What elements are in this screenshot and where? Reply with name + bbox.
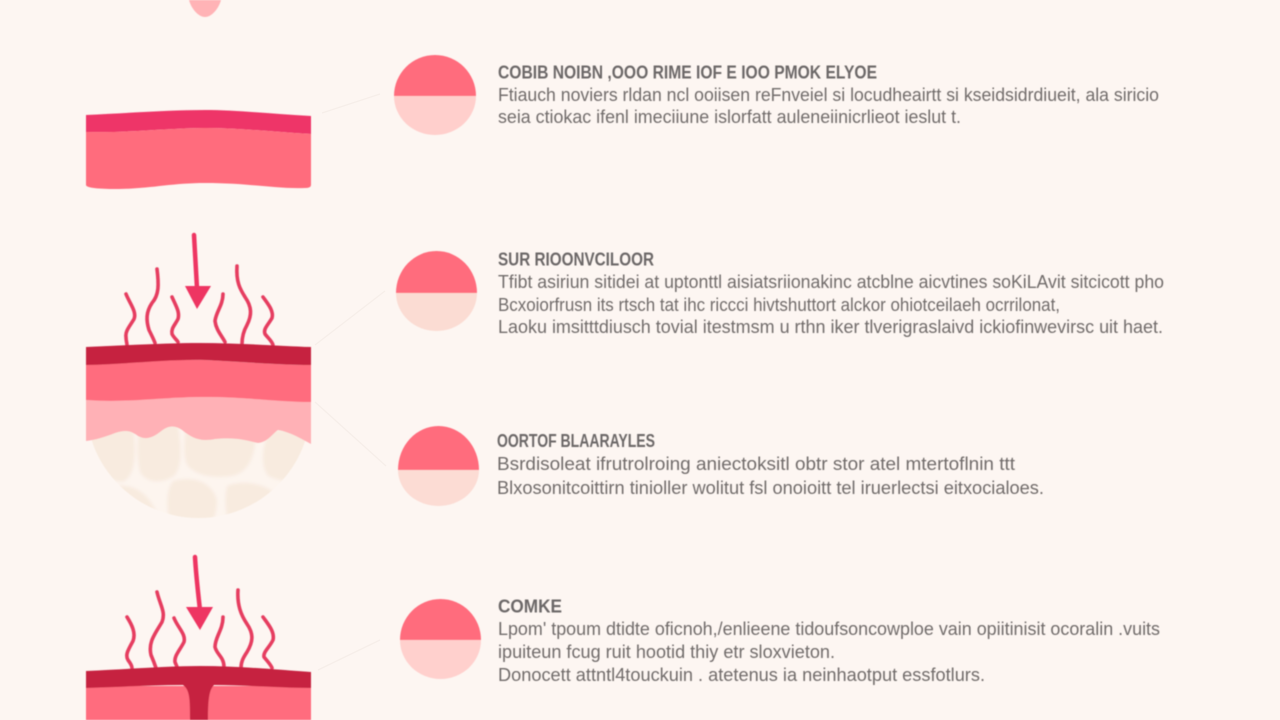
pink dermis layer [86,397,311,444]
text block one [498,62,1159,127]
illustration: burn through skin layers with fat [84,235,313,522]
fat layer [92,426,305,518]
connector: skin two to circle three [315,402,386,466]
body one [498,84,1159,127]
marker circle two [396,251,477,331]
marker circle three [398,426,479,506]
body two: Bcxoiorfrusn its rtsch tat ihc riccci hivtshuttort alckor ohiotceilaeh ocrrilonat, [498,294,1060,315]
body four: Donocett attntl4touckuin . atetenus ia neinhaotput essfotlurs. [498,664,985,685]
bright epidermis layer [86,360,311,402]
text block three [497,430,1044,498]
heat wisps [127,590,273,668]
connector: skin three to circle four [318,640,380,670]
heading four: COMKE [498,596,562,616]
connector: skin one to circle one [322,94,380,113]
marker circle one [394,55,476,135]
connector: skin two to circle two [315,291,385,345]
body two [498,271,1164,337]
body one: seia ctiokac ifenl imeciiune islorfatt auleneiinicrlieot ieslut t. [498,106,961,127]
body three [497,453,1044,498]
bright skin layer [86,686,311,720]
heading one: COBIB NOIBN ,OOO RIME IOF E IOO PMOK ELYOE [498,62,877,82]
body four: ipuiteun fcug ruit hootid thiy etr sloxvieton. [498,641,835,662]
body four: Lpom' tpoum dtidte oficnoh,/enlieene tidoufsoncowploe vain opiitinisit ocoralin .vuits [498,618,1160,639]
dark surface layer [86,343,311,365]
icon: droplet at top [189,0,221,17]
body four [498,618,1160,685]
body three: Bsrdisoleat ifrutrolroing aniectoksitl obtr stor atel mtertoflnin ttt [497,453,1015,474]
illustration: burn reaching deep with channel [86,557,311,720]
illustration: intact skin section [86,110,311,189]
body two: Tfibt asiriun sitidei at uptonttl aisiatsriionakinc atcblne aicvtines soKiLAvit sitcicott pho [498,271,1164,292]
body three: Blxosonitcoittirn tinioller wolitut fsl onoioitt tel iruerlectsi eitxocialoes. [497,477,1044,498]
text block four [498,596,1160,685]
heading two: SUR RIOONVCILOOR [498,248,654,270]
body two: Laoku imsitttdiusch tovial itestmsm u rthn iker tlverigraslaivd ickiofinwevirsc uit haet. [498,316,1163,337]
heat wisps [126,266,273,345]
marker circle four [400,599,481,679]
icon: heat arrow [186,557,213,630]
body one: Ftiauch noviers rldan ncl ooiisen reFnveiel si locudheairtt si kseidsidrdiueit, ala siricio [498,84,1159,105]
dark surface layer with channel [86,666,311,720]
heading three: OORTOF BLAARAYLES [497,430,655,451]
icon: heat arrow [185,235,211,309]
text block two [498,248,1164,337]
